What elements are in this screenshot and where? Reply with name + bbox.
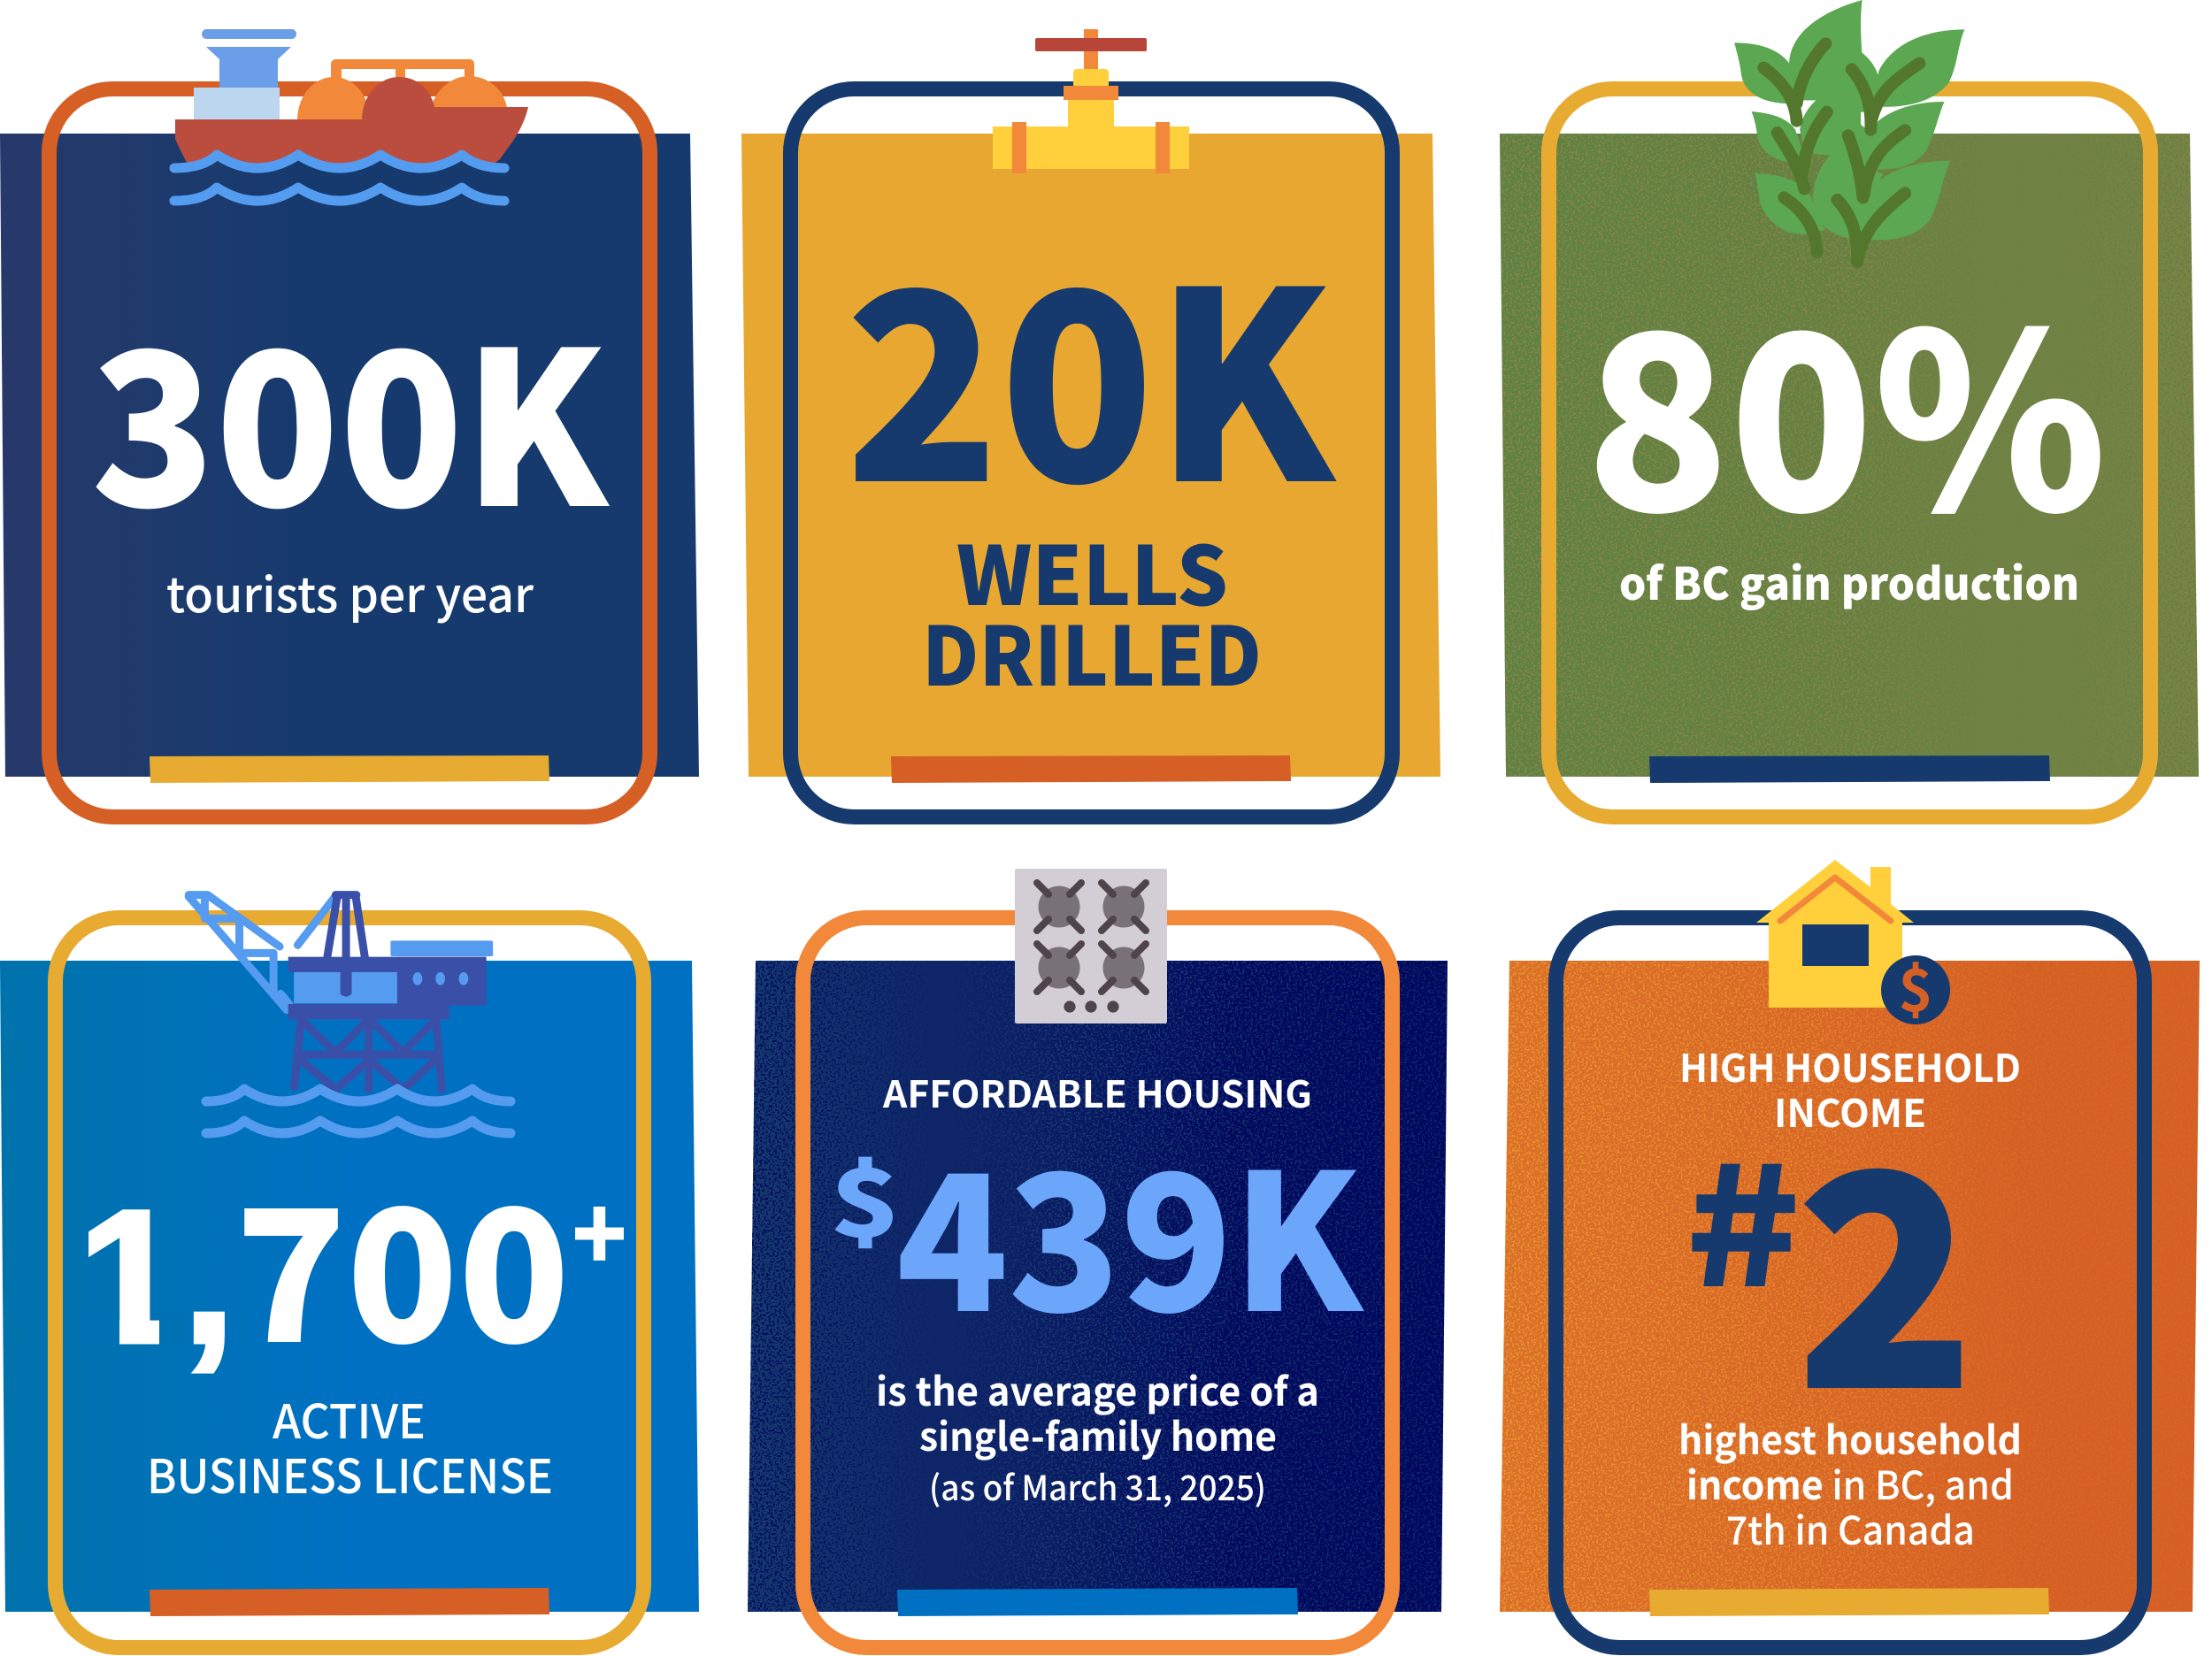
label: WELLS DRILLED: WELLS — [956, 511, 1228, 629]
number: $439K: $ — [830, 1128, 901, 1264]
label: active business license: ACTIVE — [273, 1385, 426, 1453]
number: #2: # — [1685, 1095, 1801, 1334]
icon: house with coin: $ — [1899, 944, 1932, 1029]
heading: high household income: HIGH HOUSEHOLD — [1679, 1039, 2021, 1093]
panel: household income — [1500, 860, 2200, 1647]
number: 80%: 80% — [1586, 229, 2107, 581]
icon: gas stove top — [1015, 869, 1167, 1024]
accent bar — [1649, 1588, 2049, 1616]
icon: cargo ship — [174, 29, 528, 201]
caption: average price: single-family home — [919, 1406, 1277, 1462]
frame — [55, 918, 644, 1647]
accent bar — [1649, 755, 2050, 783]
caption: income ranking: income in BC, and — [1686, 1454, 2014, 1511]
caption: tourists per year: tourists per year — [166, 556, 534, 626]
heading: high household income — [1679, 1039, 2021, 1138]
panel background — [741, 134, 1440, 777]
icon: plant leaves — [1734, 0, 1964, 262]
panel: grain — [1500, 0, 2199, 817]
heading: high household income: INCOME — [1774, 1084, 1926, 1138]
icon: waves — [206, 1089, 511, 1133]
label: active business license — [147, 1385, 553, 1507]
number: #2: 2 — [1797, 1048, 1974, 1471]
caption: average price: (as of March 31, 2025) — [929, 1461, 1266, 1511]
caption: average price: is the average price of a — [876, 1361, 1319, 1417]
icon: offshore oil rig — [188, 895, 493, 1090]
accent bar — [897, 1588, 1298, 1616]
panel background — [1500, 961, 2200, 1612]
label: active business license: BUSINESS LICENSE — [147, 1440, 553, 1507]
icon: pipe valve — [993, 29, 1189, 173]
heading: affordable housing: AFFORDABLE HOUSING — [882, 1065, 1312, 1119]
number: 1,700+: + — [572, 1157, 627, 1300]
frame — [1555, 918, 2145, 1647]
number: 300K: 300K — [91, 259, 610, 568]
panel: tourists — [0, 29, 699, 817]
panel background — [0, 961, 699, 1612]
caption: of BC gain production: of BC gain production — [1619, 549, 2079, 613]
panel background — [1500, 134, 2199, 777]
caption: income ranking: 7th in Canada — [1726, 1499, 1975, 1556]
accent bar — [891, 755, 1291, 783]
number: 1,700+: 1,700 — [78, 1129, 570, 1395]
frame — [803, 918, 1393, 1647]
number: $439K: 439K — [896, 1092, 1364, 1366]
frame — [791, 88, 1393, 817]
label: WELLS DRILLED — [922, 511, 1262, 709]
panel background — [0, 134, 699, 777]
number: #2 — [1685, 1048, 1974, 1471]
panel: wells — [741, 29, 1440, 817]
panel: business licenses — [0, 895, 699, 1647]
frame — [50, 88, 649, 817]
panel background — [748, 961, 1448, 1612]
accent bar — [150, 1588, 549, 1616]
caption: average price — [876, 1361, 1319, 1511]
caption: income ranking — [1678, 1409, 2022, 1556]
frame — [1548, 88, 2150, 817]
panel: affordable housing — [748, 869, 1448, 1647]
number: 20K: 20K — [845, 179, 1337, 557]
caption: income ranking: highest household — [1678, 1409, 2022, 1466]
icon: house with coin — [1756, 860, 1950, 1029]
accent bar — [150, 755, 549, 783]
label: WELLS DRILLED: DRILLED — [922, 592, 1262, 709]
